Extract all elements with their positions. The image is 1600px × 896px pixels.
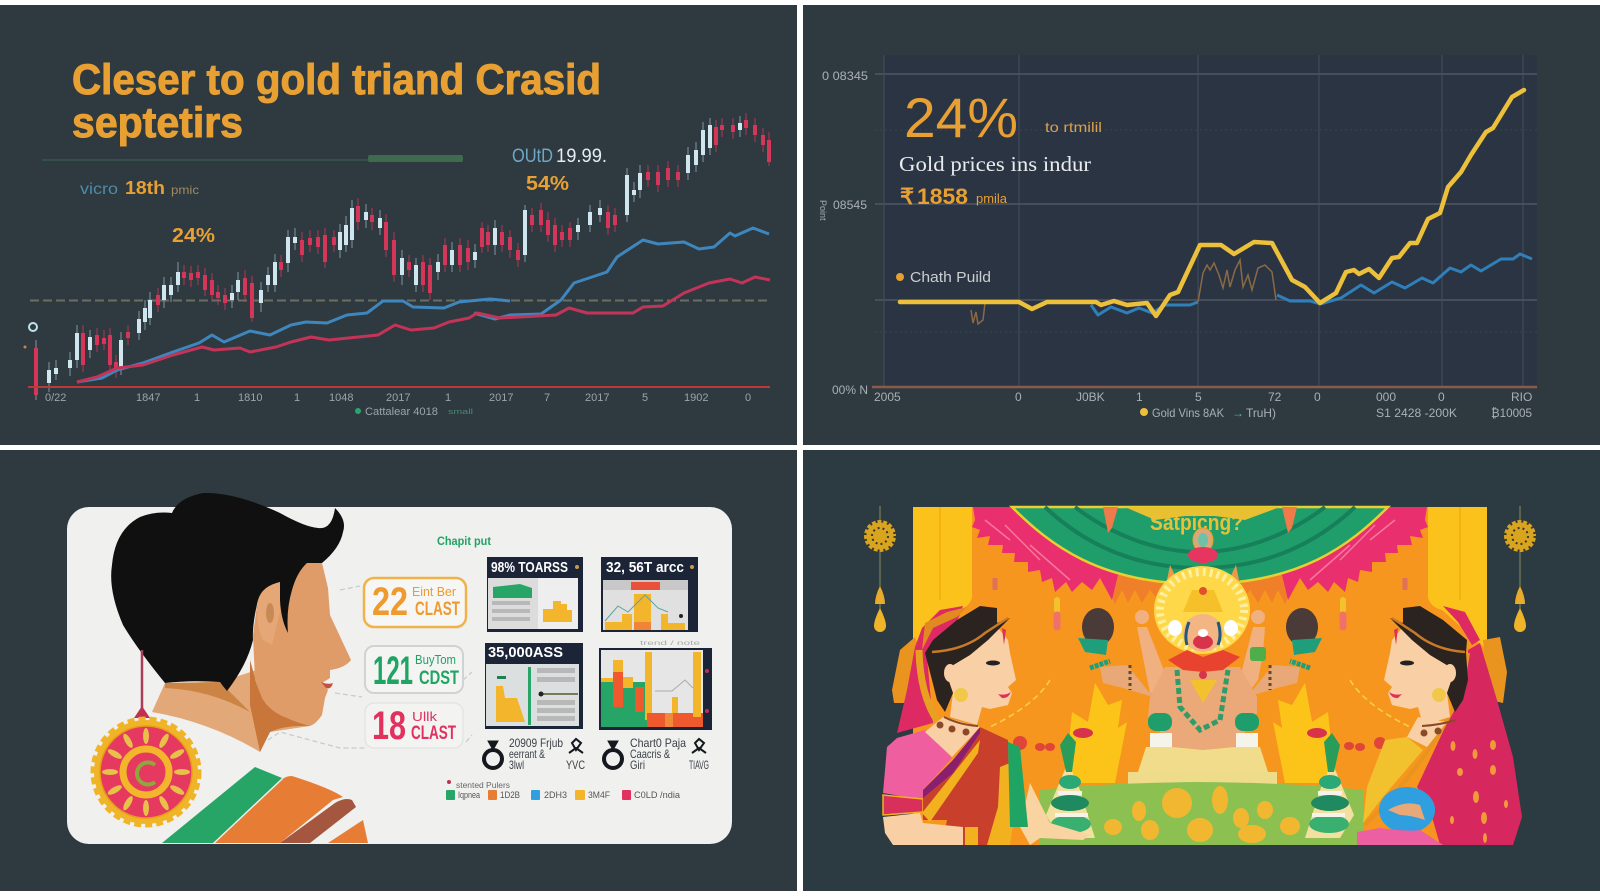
legend — [1140, 406, 1532, 420]
legend: 1D2B — [500, 790, 520, 800]
panel: gold price line chart — [803, 5, 1600, 445]
stat card: 18: 18 — [372, 704, 406, 748]
chest — [925, 717, 980, 757]
title: Cleser to gold triand Crasid — [72, 56, 601, 104]
person — [111, 493, 368, 843]
stat card: 22: 22 — [372, 580, 408, 624]
ear and earring — [944, 664, 956, 682]
stat note: to rtmilil — [1045, 119, 1102, 135]
curtains — [913, 507, 1487, 650]
x labels — [874, 390, 1532, 404]
veil — [1417, 643, 1522, 845]
callout: 24%: 24% — [172, 225, 215, 247]
offering mound — [1040, 782, 1364, 845]
pink fringe — [972, 507, 1428, 600]
axis labels: 2017 — [585, 392, 609, 404]
caption 2 — [604, 736, 709, 772]
caption 2: Caacris & — [630, 747, 670, 761]
callout: 54%: 54% — [526, 173, 569, 195]
necklace — [1177, 670, 1228, 730]
cherries — [1013, 736, 1386, 751]
dashboard 4 — [599, 641, 712, 730]
cap — [922, 607, 967, 650]
knees — [1148, 713, 1259, 748]
y axis labels: 0 08345 — [822, 69, 868, 83]
price — [900, 184, 1008, 209]
big stat: 24% — [904, 86, 1018, 149]
callout: 18th — [80, 178, 199, 198]
eye and lips — [1400, 660, 1414, 666]
legend: Cattalear 4018 — [365, 406, 438, 418]
dashboard 4: trend / note — [640, 641, 701, 647]
yellow chest — [1190, 680, 1217, 703]
x labels: 72 — [1268, 390, 1282, 404]
head — [1183, 614, 1223, 652]
x labels: 0 — [1314, 390, 1321, 404]
dashboard 2: 32, 56T arcc — [606, 559, 684, 576]
stat card: 18: CLAST — [411, 723, 456, 744]
legend: small — [448, 409, 474, 416]
stat card: 22 — [364, 578, 466, 627]
axis labels: 1847 — [136, 392, 160, 404]
axis labels: 1902 — [684, 392, 708, 404]
caption 2: Chart0 Paja — [630, 736, 686, 750]
body — [1148, 667, 1257, 750]
x labels: 1 — [1136, 390, 1143, 404]
series label: Chath Puild — [910, 269, 991, 286]
x axis — [28, 386, 770, 388]
axis labels: 1 — [294, 392, 300, 404]
caption 1 — [484, 736, 585, 772]
y axis labels: 08545 — [833, 198, 867, 212]
price: 1858 — [917, 184, 968, 209]
dashboard 1: 98% TOARSS — [491, 559, 568, 576]
heading: Chapit put — [437, 534, 491, 548]
medallion — [93, 650, 199, 825]
legend: C0LD /ndia — [634, 790, 680, 800]
legend: Gold Vins 8AK — [1152, 406, 1224, 420]
mouth — [1193, 635, 1213, 649]
candlesticks — [36, 113, 769, 400]
hanging decorations — [995, 578, 1405, 627]
panel: candlestick chart — [0, 5, 797, 445]
necklace — [936, 717, 978, 736]
sleeve band — [883, 795, 923, 815]
legend: 2DH3 — [544, 790, 567, 800]
x labels: J0BK — [1076, 390, 1105, 404]
flowers — [1483, 637, 1507, 703]
pots — [1078, 608, 1322, 668]
panel: person with dashboards — [0, 450, 797, 891]
marker — [24, 323, 37, 348]
blue line — [1091, 254, 1532, 315]
icon: emblem — [604, 739, 706, 768]
flames — [1065, 683, 1335, 783]
stat card: 18: Ullk — [412, 709, 438, 724]
veil edge — [1365, 653, 1468, 825]
raised arms — [1137, 627, 1265, 697]
plot area — [884, 55, 1537, 387]
title: septetirs — [72, 99, 243, 147]
axis labels: 0 — [745, 392, 751, 404]
card — [67, 507, 732, 844]
stat card: 121: CDST — [419, 668, 459, 689]
lamps on drape — [1103, 507, 1297, 533]
legend: 3M4F — [588, 790, 610, 800]
callout: 18th: vicro — [80, 181, 118, 198]
axis labels: 7 — [544, 392, 550, 404]
dashboard 1 — [487, 557, 583, 632]
legend — [355, 406, 474, 418]
callout: price: OUtD — [512, 146, 553, 167]
y axis labels: Point — [818, 200, 828, 221]
green drape — [1012, 507, 1388, 584]
legend: TruH) — [1246, 406, 1276, 420]
side arms — [1100, 665, 1300, 697]
axis labels: 1810 — [238, 392, 262, 404]
price: pmila — [976, 191, 1008, 206]
chest — [1407, 717, 1447, 747]
gold line — [900, 90, 1524, 316]
title — [72, 56, 601, 147]
axis labels: 5 — [642, 392, 648, 404]
bindi — [1002, 628, 1006, 645]
stat card: 121: 121 — [373, 649, 413, 693]
axis labels: 1 — [194, 392, 200, 404]
fringe streaks — [985, 520, 1395, 580]
subtitle: Gold prices ins indur — [899, 152, 1091, 176]
ear — [257, 582, 280, 645]
flowers — [892, 637, 920, 703]
neck — [152, 660, 310, 752]
caption 2: TIAVG — [689, 758, 709, 772]
sari — [1363, 737, 1423, 823]
banner text: Satpicng? — [1150, 510, 1243, 535]
cheek pads — [1168, 620, 1182, 636]
legend: stented Pulers — [456, 781, 510, 790]
collar — [1168, 650, 1240, 672]
legend: ₿10005 — [1491, 406, 1532, 420]
x labels: 0 — [1015, 390, 1022, 404]
orange fringe — [1100, 570, 1300, 604]
callout: price — [512, 146, 607, 167]
garlands — [1046, 728, 1354, 838]
callout: 18th: 18th — [125, 178, 165, 198]
connector lines — [268, 586, 472, 748]
blue bag — [1379, 787, 1435, 833]
dashboard 3: 35,000ASS — [488, 644, 563, 661]
pedestal — [1138, 747, 1268, 772]
blouse — [883, 730, 952, 800]
legend: S1 2428 -200K — [1376, 406, 1457, 420]
sash — [162, 767, 368, 843]
hair — [111, 493, 344, 691]
blue trend line — [77, 228, 769, 382]
pink cloth — [1357, 828, 1443, 845]
axis labels: 1 — [445, 392, 451, 404]
bindi — [1394, 628, 1398, 645]
necklace — [1420, 720, 1456, 736]
dashboard 3 — [485, 643, 583, 729]
thin brown line — [971, 260, 1276, 324]
gold coins — [1104, 786, 1300, 843]
x labels: RIO — [1511, 390, 1532, 404]
fists — [1135, 610, 1149, 624]
legend — [446, 780, 680, 800]
panel: festive illustration — [803, 450, 1600, 891]
axis labels — [45, 392, 751, 404]
stat card: 22: CLAST — [415, 599, 460, 620]
callout: 18th: pmic — [171, 183, 199, 197]
caption 1: eerrant & — [509, 747, 545, 761]
x labels: 000 — [1376, 390, 1396, 404]
stat card: 22: Eint Ber — [412, 584, 457, 599]
woman right — [1357, 606, 1522, 845]
ornament left — [864, 506, 896, 632]
neck and face — [945, 628, 1016, 725]
progress bar — [42, 155, 463, 162]
deity — [1100, 565, 1300, 787]
caption 1: 3lwl — [509, 758, 524, 772]
tears — [1186, 622, 1220, 645]
neck and face — [1384, 628, 1455, 725]
axis labels: 0/22 — [45, 392, 66, 404]
headpiece — [1443, 606, 1480, 645]
price: ₹ — [900, 184, 914, 209]
eye and lips — [986, 660, 1000, 666]
y axis labels — [818, 69, 868, 397]
stat card: 18 — [365, 703, 463, 748]
x axis — [872, 386, 1537, 388]
icon: emblem — [484, 739, 583, 768]
hair — [925, 606, 1010, 712]
stat card: 121 — [365, 646, 463, 693]
x labels: 0 — [1438, 390, 1445, 404]
hand — [1020, 783, 1090, 845]
legend: → — [1232, 406, 1244, 420]
bead strings — [990, 680, 1410, 727]
medallion petals — [102, 728, 190, 816]
hair — [1390, 606, 1468, 712]
bangles — [1250, 647, 1266, 661]
caption 1: YVC — [566, 758, 585, 772]
top jewel — [1188, 528, 1218, 563]
stage background — [913, 507, 1487, 845]
lips — [321, 682, 333, 688]
veil dots — [1450, 740, 1508, 843]
axis labels: 2017 — [386, 392, 410, 404]
ornament right — [1504, 506, 1536, 632]
red trend line — [77, 277, 770, 382]
dashboard 2 — [601, 557, 698, 632]
x labels: 5 — [1195, 390, 1202, 404]
axis labels: 1048 — [329, 392, 353, 404]
woman left — [883, 606, 1090, 845]
sari — [923, 727, 1010, 845]
x labels: 2005 — [874, 390, 901, 404]
axis labels: 2017 — [489, 392, 513, 404]
face — [253, 563, 351, 726]
legend: Iqpnea — [458, 790, 480, 800]
veil — [897, 606, 963, 733]
halo — [1154, 566, 1250, 654]
y axis labels: 00% N — [832, 383, 868, 397]
callout: price: 19.99. — [556, 146, 607, 167]
arm — [883, 813, 963, 845]
caption 2: Giri — [630, 758, 645, 772]
stat card: 121: BuyTom — [415, 652, 456, 667]
caption 1: 20909 Frjub — [509, 736, 563, 750]
reference dashed line — [30, 300, 770, 302]
ears — [1165, 565, 1241, 590]
ear and earring — [1444, 664, 1456, 682]
